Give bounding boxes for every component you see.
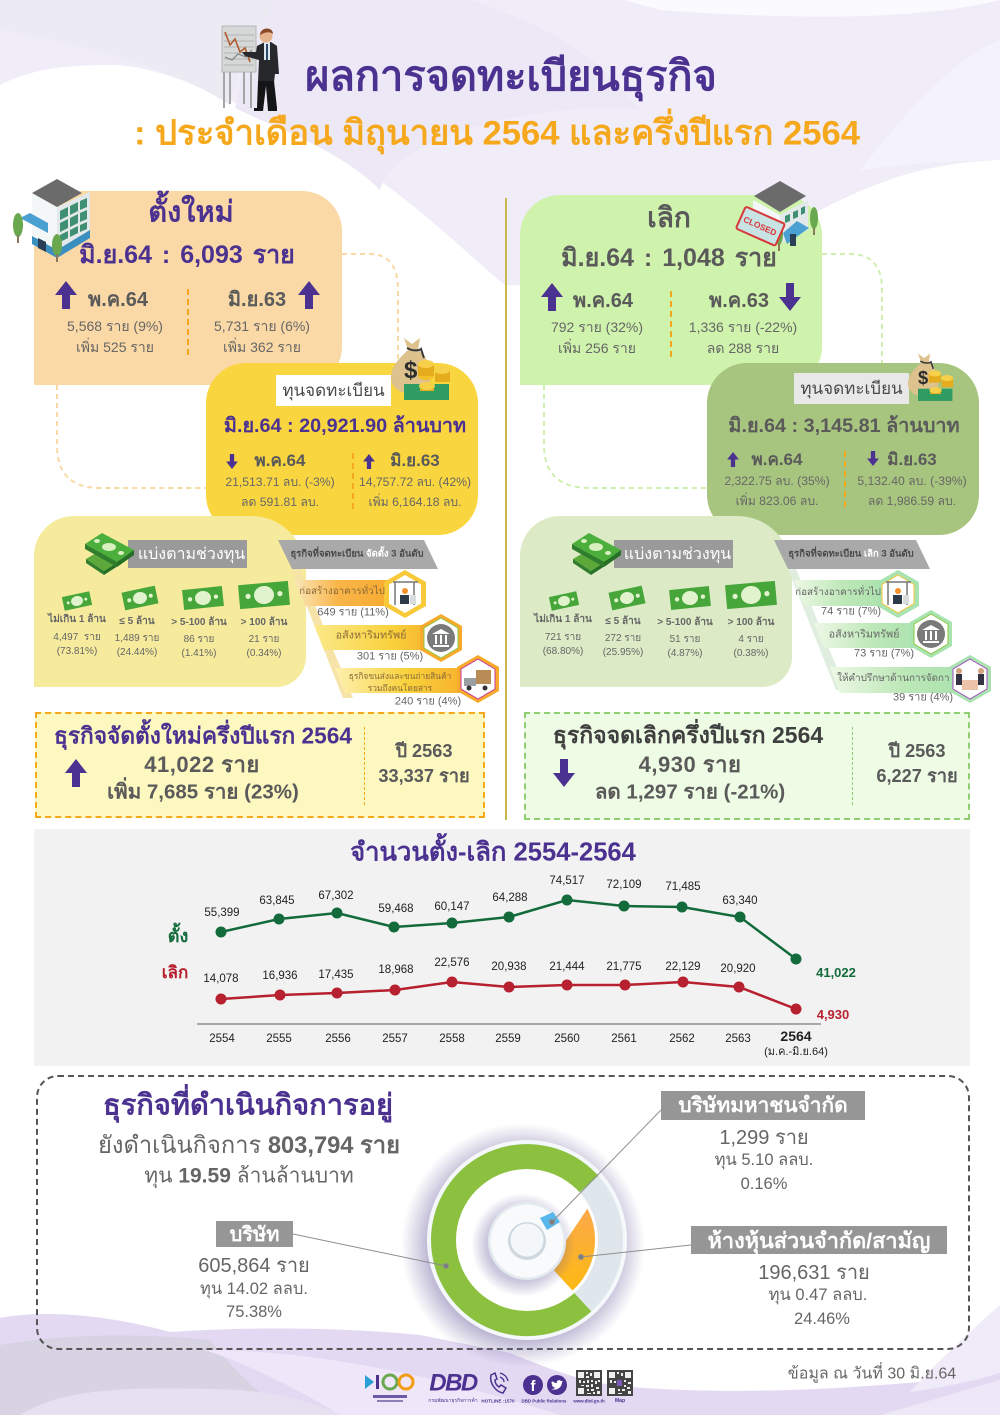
label: capital: ทุนจดทะเบียน: [282, 381, 385, 400]
panel: top three closures: [774, 540, 996, 710]
line chart: [0, 829, 1000, 1069]
text: Jun 63 values: เพิ่ม 362 ราย: [223, 339, 301, 355]
heading: trend chart: จำนวนตั้ง-เลิก 2554-2564: [350, 839, 636, 867]
label: May 63: พ.ค.63: [709, 290, 769, 312]
icon: bill extra large: [238, 580, 290, 610]
heading: half year closures: ธุรกิจจดเลิกครึ่งปีแรก 2564: [553, 722, 823, 748]
icon: bill medium: [122, 586, 158, 610]
icon: down arrow: [779, 283, 801, 311]
icon: money bag: $: [404, 357, 418, 384]
text: public company figures: 1,299 ราย: [719, 1127, 809, 1149]
icon: up arrow: [55, 281, 77, 309]
text: Jun 63 closures capital: ลด 1,986.59 ลบ.: [868, 494, 956, 508]
line chart: 2560: [554, 1033, 580, 1045]
text: half year change: เพิ่ม 7,685 ราย (23%): [107, 781, 299, 804]
label: public company: บริษัทมหาชนจำกัด: [678, 1094, 848, 1117]
icon: bill medium: [609, 586, 645, 610]
text: 5-100M value: (1.41%): [181, 648, 217, 659]
line chart: 2559: [495, 1033, 521, 1045]
label: May 64: พ.ค.64: [255, 451, 305, 470]
line chart: 60,147: [434, 901, 470, 913]
icon: down arrow: [867, 451, 879, 466]
text: public company capital: ทุน 5.10 ลลบ.: [715, 1151, 813, 1169]
label: over 100M: > 100 ล้าน: [241, 617, 287, 628]
title: ผลการจดทะเบียนธุรกิจ: [305, 52, 717, 99]
text: construction value: 649 ราย (11%): [317, 606, 389, 618]
line chart: 2558: [439, 1033, 465, 1045]
panel: registered capital: [206, 363, 478, 535]
text: up to 5M value: 272 ราย: [605, 633, 641, 644]
footer logos: [360, 1368, 640, 1408]
text: May 64 values: 5,568 ราย (9%): [67, 318, 163, 334]
group: left bills: [62, 580, 290, 611]
line chart: 20,920: [720, 963, 756, 975]
text: transport: [349, 671, 451, 693]
label: capital: ทุนจดทะเบียน: [800, 379, 903, 398]
label: capital: [276, 375, 391, 406]
text: up to 1M value: 4,497 ราย: [53, 632, 101, 643]
icon: hexagon real estate: [909, 609, 953, 659]
icon: qr map: [607, 1370, 633, 1396]
icon: bill large: [182, 586, 224, 610]
text: up to 5M value: (25.95%): [603, 647, 643, 658]
label: top three new: ธุรกิจที่จดทะเบียน จัดตั้ง 3 อันดับ: [290, 548, 424, 559]
text: May 64 closures capital: เพิ่ม 823.06 ลบ.: [736, 494, 818, 508]
logo: DBD: DBD: [429, 1370, 477, 1397]
text: up to 1M value: (73.81%): [57, 646, 97, 657]
line chart: 21,775: [606, 961, 642, 973]
line chart: เลิก: [162, 963, 188, 982]
text: 5-100M value: [181, 634, 217, 659]
text: May 64 values: [67, 318, 163, 355]
logo caption: กรมพัฒนาธุรกิจการค้า: [428, 1398, 478, 1404]
label: over 100M: > 100 ล้าน: [728, 617, 774, 628]
text: 5-100M value: (4.87%): [667, 648, 703, 659]
line chart: 2554: [209, 1033, 235, 1045]
text: partnership figures: 196,631 ราย: [758, 1262, 870, 1284]
line chart: 14,078: [203, 973, 239, 985]
line chart: 64,288: [492, 892, 528, 904]
panel: active businesses: [36, 1075, 970, 1350]
text: May 64 capital: [225, 475, 335, 508]
text: May 63 closures: 1,336 ราย (-22%): [689, 319, 797, 335]
line chart: 20,938: [491, 961, 527, 973]
text: active count: ยังดำเนินกิจการ 803,794 ราย: [98, 1133, 400, 1159]
text: up to 5M value: [603, 632, 643, 660]
dashed divider: [187, 289, 189, 355]
icon: cash stack: [572, 532, 622, 574]
label: partnership: ห้างหุ้นส่วนจำกัด/สามัญ: [708, 1228, 930, 1252]
line chart: 22,576: [434, 957, 470, 969]
line chart: 71,485: [665, 881, 701, 893]
label: May 64: พ.ค.64: [88, 289, 148, 311]
figure: june closures: มิ.ย.64 : 1,048 ราย: [561, 244, 777, 272]
icon: cash stack: [85, 533, 134, 575]
icon: hexagon construction: [384, 570, 426, 618]
icon: down arrow: [226, 454, 238, 469]
label: company: บริษัท: [230, 1224, 279, 1246]
text: consulting: ให้คำปรึกษาด้านการจัดการ: [837, 673, 955, 684]
icon: closed building: CLOSED: [742, 214, 778, 238]
text: up to 5M value: (24.44%): [117, 647, 157, 658]
text: company figures: 605,864 ราย: [198, 1255, 310, 1277]
text: Jun 63 capital: เพิ่ม 6,164.18 ลบ.: [368, 494, 462, 508]
icon: money bag: [908, 354, 954, 401]
icon: hexagon real estate: [420, 614, 462, 662]
icon: up arrow: [727, 452, 739, 467]
line chart: 4,930: [817, 1007, 849, 1022]
text: up to 1M value: [53, 632, 101, 657]
text: May 64 closures capital: [724, 474, 830, 508]
text: up to 1M value: 721 ราย: [545, 632, 581, 643]
text: company capital: ทุน 14.02 ลลบ.: [200, 1280, 308, 1298]
logo: 100 years: [365, 1372, 425, 1406]
icon: bill extra large: [725, 580, 777, 610]
text: real estate value: 301 ราย (5%): [357, 650, 423, 662]
dashed divider: [352, 453, 354, 509]
panel: half year new: [35, 712, 485, 818]
panel: capital bands new: [34, 516, 306, 687]
dashed divider: [364, 727, 365, 805]
text: real estate: อสังหาริมทรัพย์: [829, 629, 899, 641]
line chart: 63,340: [722, 895, 758, 907]
group: right bills: [520, 576, 792, 666]
icon: hexagon construction: [876, 569, 920, 619]
text: up to 1M value: [543, 631, 583, 659]
text: Jun 63 closures capital: [857, 474, 967, 508]
text: May 63 closures: ลด 288 ราย: [707, 340, 779, 356]
text: Jun 63 capital: [359, 475, 471, 508]
line chart: 2563: [725, 1033, 751, 1045]
line chart: 16,936: [262, 970, 298, 982]
icon: twitter: [547, 1375, 567, 1395]
panel: trend chart: [34, 829, 970, 1066]
label: 5-100M: > 5-100 ล้าน: [657, 617, 713, 628]
label: capital bands: แบ่งตามช่วงทุน: [138, 546, 245, 562]
label: company: [216, 1221, 293, 1247]
icon: bill large: [669, 585, 711, 611]
text: 5-100M value: [667, 633, 703, 661]
text: public company share: 0.16%: [741, 1175, 787, 1193]
label: up to 1M: ไม่เกิน 1 ล้าน: [48, 614, 106, 625]
text: up to 1M value: (68.80%): [543, 646, 583, 657]
text: consulting value: 39 ราย (4%): [893, 691, 953, 703]
text: Jun 63 values: [214, 318, 310, 355]
line chart: 17,435: [318, 969, 354, 981]
panel: centre divider: [505, 198, 507, 820]
label: capital bands: [128, 540, 247, 568]
text: May 64 capital: 21,513.71 ลบ. (-3%): [225, 475, 335, 489]
text: over 100M value: 4 ราย: [738, 634, 764, 645]
leader lines: [0, 1080, 1000, 1300]
heading: closures: เลิก: [647, 202, 691, 233]
icon: up arrow: [541, 283, 563, 311]
heading: half year new: ธุรกิจจัดตั้งใหม่ครึ่งปีแรก 2564: [54, 722, 352, 748]
line chart: 2564: [780, 1028, 812, 1044]
label: up to 5M: ≤ 5 ล้าน: [119, 616, 155, 627]
line chart: 55,399: [204, 907, 240, 919]
caption: website: www.dbd.go.th: [573, 1398, 605, 1403]
line chart: 22,129: [665, 961, 701, 973]
text: prior year new: 33,337 ราย: [378, 766, 470, 786]
text: transport value: 240 ราย (4%): [395, 695, 461, 707]
text: partnership share: 24.46%: [794, 1310, 850, 1328]
icon: up arrow: [363, 454, 375, 469]
text: over 100M value: [246, 634, 282, 659]
line chart: 41,022: [816, 965, 856, 980]
text: construction: ก่อสร้างอาคารทั่วไป: [299, 586, 385, 597]
label: May 64: พ.ค.64: [752, 450, 802, 469]
line chart: 18,968: [378, 964, 414, 976]
line chart: 21,444: [549, 961, 585, 973]
subtitle: : ประจำเดือน มิถุนายน 2564 และครึ่งปีแรก 2564: [134, 114, 860, 152]
figure: june new count: มิ.ย.64 : 6,093 ราย: [79, 241, 295, 269]
line chart: (ม.ค.-มิ.ย.64): [764, 1046, 828, 1058]
text: construction: ก่อสร้างอาคารทั่วไป: [795, 587, 881, 598]
panel: closures: [520, 195, 822, 385]
line chart: 2556: [325, 1033, 351, 1045]
text: real estate: อสังหาริมทรัพย์: [336, 630, 406, 642]
icon: hotline phone: [488, 1371, 510, 1395]
text: real estate value: 73 ราย (7%): [854, 647, 914, 659]
text: up to 5M value: 1,489 ราย: [115, 633, 159, 644]
line chart: 2557: [382, 1033, 408, 1045]
text: Jun 63 values: 5,731 ราย (6%): [214, 318, 310, 334]
icon: facebook: f: [530, 1378, 536, 1395]
text: prior year closures: ปี 2563: [888, 741, 946, 761]
label: capital: [794, 373, 909, 404]
label: capital bands: แบ่งตามช่วงทุน: [624, 546, 731, 562]
text: May 63 closures: [689, 319, 797, 356]
text: 5-100M value: 86 ราย: [184, 634, 214, 645]
caption: map: Map: [615, 1398, 625, 1404]
icon: presenter with chart board: [222, 26, 279, 111]
text: prior year new: ปี 2563: [395, 741, 453, 761]
text: partnership capital: ทุน 0.47 ลลบ.: [769, 1286, 867, 1304]
label: capital bands: [614, 540, 733, 568]
label: up to 5M: ≤ 5 ล้าน: [605, 616, 641, 627]
label: Jun 63: มิ.ย.63: [887, 450, 937, 469]
text: company share: 75.38%: [226, 1303, 282, 1321]
panel: closures capital: [707, 363, 979, 535]
text: transport: รวมถึงคนโดยสาร: [368, 683, 432, 693]
icon: money bag: [391, 338, 450, 400]
icon: facebook: [523, 1375, 543, 1395]
line chart: 2562: [669, 1033, 695, 1045]
heading: active businesses: ธุรกิจที่ดำเนินกิจการอยู่: [103, 1090, 393, 1122]
text: construction value: 74 ราย (7%): [821, 605, 881, 617]
figure: half year new: 41,022 ราย: [144, 752, 260, 777]
icon: up arrow: [65, 759, 87, 787]
line chart: 74,517: [549, 875, 585, 887]
line chart: 67,302: [318, 890, 354, 902]
label: Jun 63: มิ.ย.63: [228, 289, 286, 311]
panel: new registrations: [34, 191, 342, 385]
icon: qr website: [576, 1370, 602, 1396]
text: May 64 closures: 792 ราย (32%): [551, 319, 643, 335]
caption: public relations: DBD Public Relations: [522, 1398, 566, 1403]
icon: money bag: $: [918, 367, 928, 388]
label: public company: [661, 1091, 865, 1120]
panel: capital bands closures: [520, 516, 792, 687]
icon: bill small: [62, 591, 92, 611]
figure: june capital: มิ.ย.64 : 20,921.90 ล้านบาท: [224, 415, 466, 437]
icon: hexagon transport: [457, 655, 499, 703]
icon: up arrow: [298, 281, 320, 309]
dashed divider: [844, 451, 846, 507]
line chart: 63,845: [259, 895, 295, 907]
line chart: 2561: [611, 1033, 637, 1045]
text: May 64 closures: [551, 319, 643, 356]
line chart: 59,468: [378, 903, 414, 915]
line chart: ตั้ง: [168, 922, 188, 946]
text: transport: ธุรกิจขนส่งและขนถ่ายสินค้า: [349, 671, 451, 681]
text: May 64 closures capital: 2,322.75 ลบ. (35%): [724, 474, 830, 488]
icon: hexagon consulting: [948, 654, 992, 704]
heading: new: ตั้งใหม่: [148, 197, 234, 229]
text: Jun 63 closures capital: 5,132.40 ลบ. (-39%): [857, 474, 967, 488]
text: May 64 closures: เพิ่ม 256 ราย: [558, 340, 636, 356]
text: May 64 values: เพิ่ม 525 ราย: [76, 339, 154, 355]
panel: half year closures: [524, 712, 970, 820]
text: prior year closures: 6,227 ราย: [876, 766, 958, 786]
text: prior year new: [378, 741, 470, 786]
label: up to 1M: ไม่เกิน 1 ล้าน: [534, 614, 592, 625]
line chart: 72,109: [606, 879, 642, 891]
figure: half year closures: 4,930 ราย: [639, 752, 741, 777]
text: over 100M value: [733, 633, 769, 661]
text: up to 5M value: [115, 633, 159, 658]
text: over 100M value: (0.38%): [733, 648, 769, 659]
label: May 64: พ.ค.64: [573, 290, 633, 312]
icon: office building: [13, 179, 90, 262]
dashed connectors: [56, 253, 883, 489]
donut chart: [400, 1113, 654, 1367]
label: Jun 63: มิ.ย.63: [390, 451, 440, 470]
dashed divider: [852, 727, 853, 805]
figure: closures capital: มิ.ย.64 : 3,145.81 ล้านบาท: [728, 415, 960, 437]
icon: down arrow: [553, 759, 575, 787]
label: top three closures: ธุรกิจที่จดทะเบียน เลิก 3 อันดับ: [788, 548, 914, 559]
text: prior year closures: [876, 739, 958, 789]
text: over 100M value: (0.34%): [246, 648, 282, 659]
label: 5-100M: > 5-100 ล้าน: [171, 617, 227, 628]
text: 5-100M value: 51 ราย: [670, 634, 700, 645]
panel: top three new: [278, 540, 460, 698]
text: active capital: ทุน 19.59 ล้านล้านบาท: [144, 1164, 354, 1187]
text: over 100M value: 21 ราย: [249, 634, 279, 645]
dashed divider: [670, 291, 672, 357]
line chart: 2555: [266, 1033, 292, 1045]
text: half year closure change: ลด 1,297 ราย (-21%): [595, 781, 785, 804]
text: May 64 capital: ลด 591.81 ลบ.: [241, 494, 319, 508]
text: data date: ข้อมูล ณ วันที่ 30 มิ.ย.64: [788, 1365, 956, 1382]
caption: hotline: HOTLINE :1570: [481, 1398, 515, 1403]
icon: bill small: [549, 591, 579, 611]
text: Jun 63 capital: 14,757.72 ลบ. (42%): [359, 475, 471, 489]
icon: closed building: [736, 181, 818, 251]
